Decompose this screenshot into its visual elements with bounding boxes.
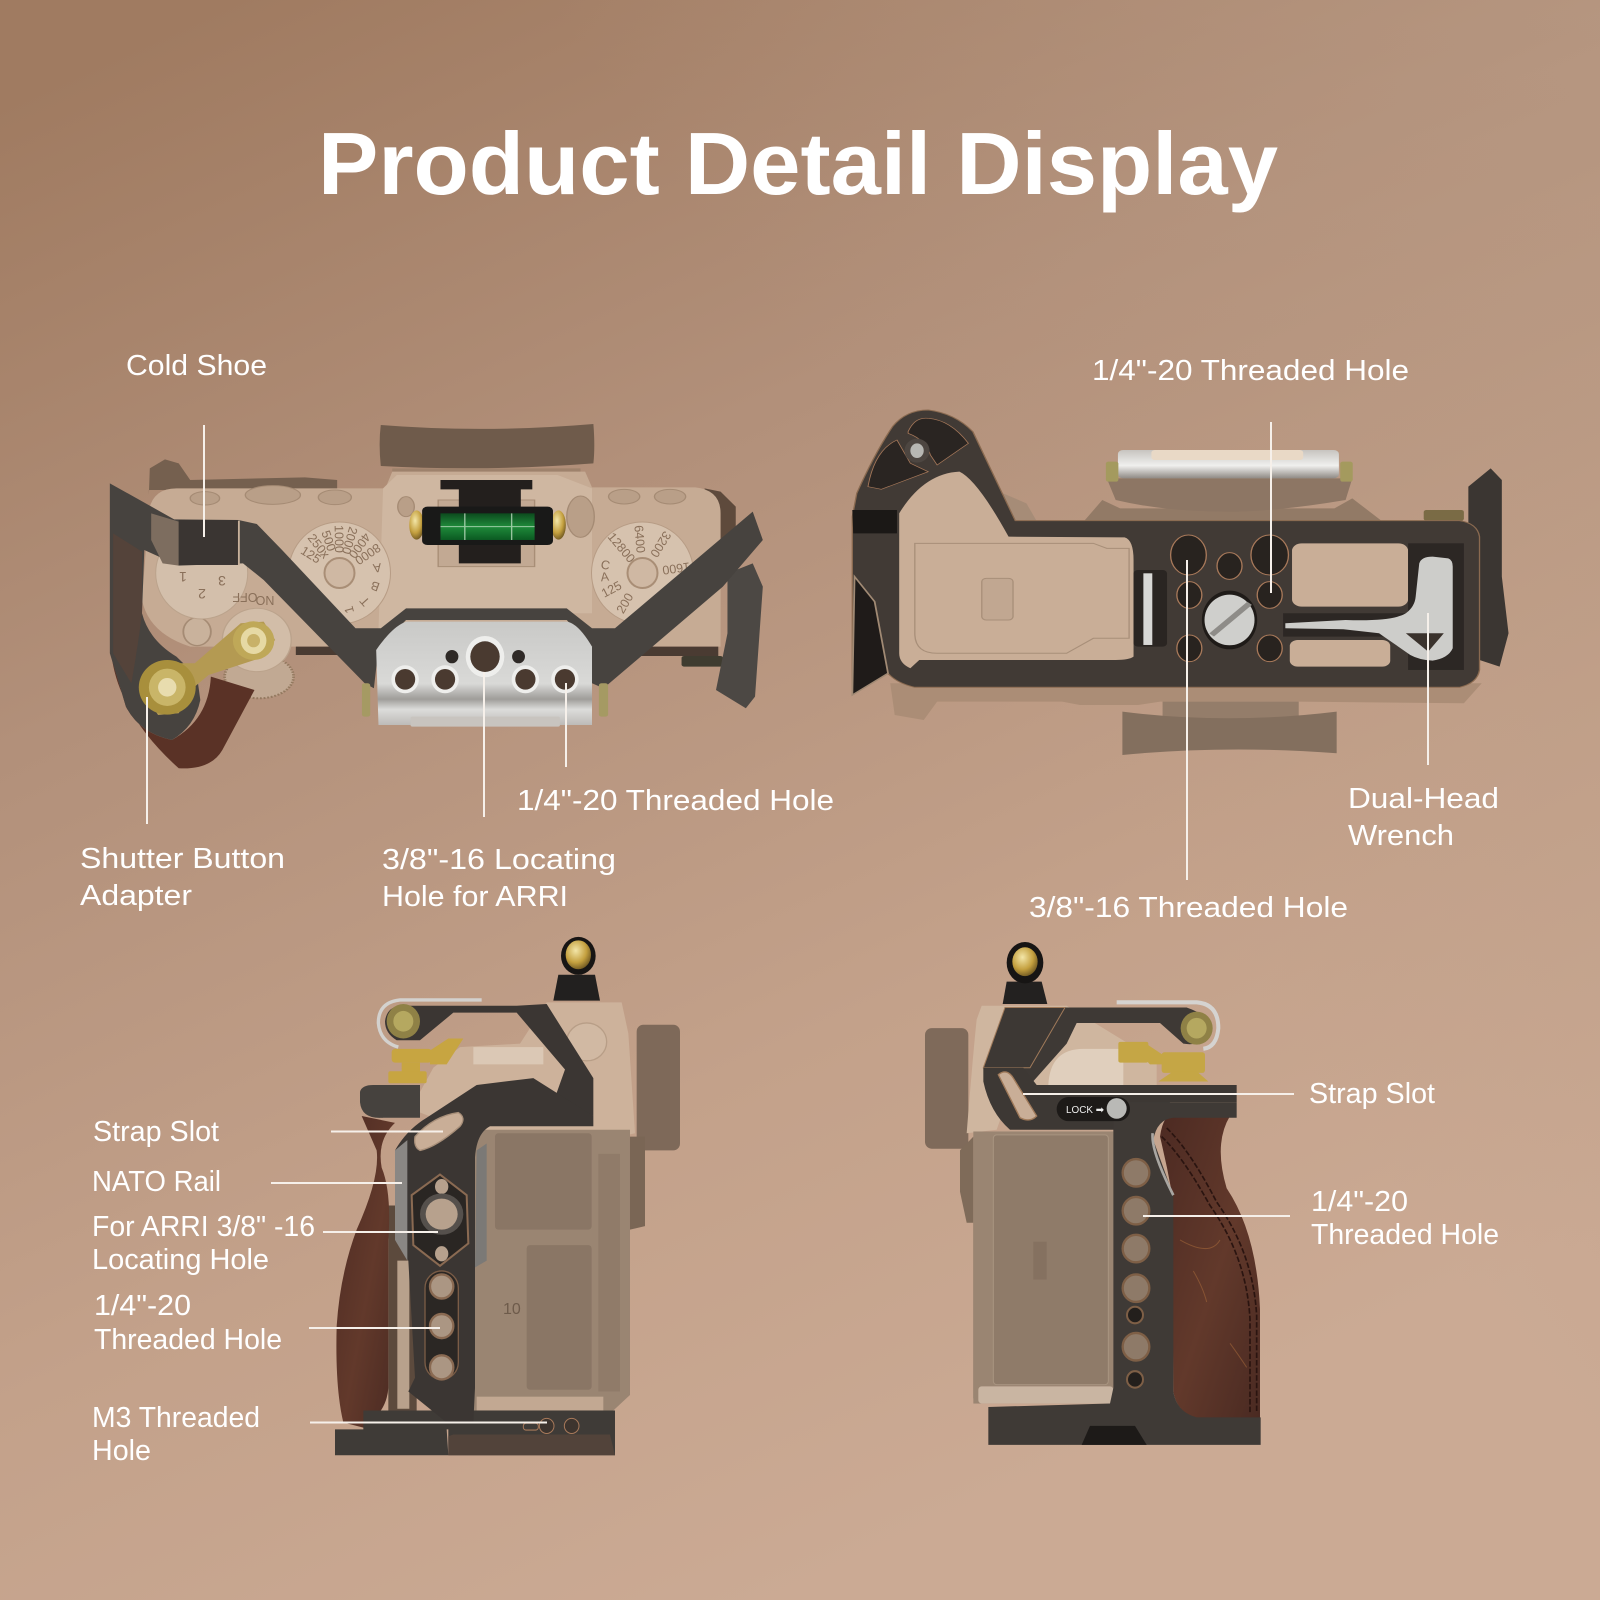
threaded holes — [1123, 1159, 1149, 1388]
panel: left side view of cage — [335, 937, 680, 1455]
dials: 12800 — [605, 530, 638, 566]
grip leather — [1160, 1113, 1260, 1419]
dials: 200 — [614, 591, 636, 616]
dials: 125 — [599, 578, 624, 601]
grip stitching — [1162, 1128, 1257, 1412]
top arm — [385, 1004, 593, 1116]
label: shutter button adapter: Adapter — [80, 880, 192, 912]
cage column and base — [988, 1102, 1261, 1445]
label: strap slot left: Strap Slot — [93, 1116, 219, 1148]
dials: 1600 — [661, 559, 691, 577]
label: dual-head wrench: Dual-Head — [1348, 783, 1499, 815]
label: dual-head wrench: Wrench — [1348, 820, 1454, 852]
dials: 125 — [298, 544, 323, 566]
faded eyecup — [380, 424, 594, 468]
cage band and column — [395, 1078, 593, 1422]
camera upper — [967, 1006, 1157, 1133]
dials: 3200 — [647, 529, 674, 560]
dials: OFF — [232, 590, 258, 604]
engraved model number: 10 — [503, 1301, 521, 1318]
dials: 6400 — [631, 525, 648, 554]
top plate — [360, 1085, 420, 1118]
strap ball — [553, 937, 600, 1001]
faded eyecup — [637, 1025, 680, 1150]
dials: 2000 — [339, 525, 360, 556]
dials: 8000 — [352, 540, 383, 568]
label: M3 threaded hole: Hole — [92, 1435, 151, 1467]
hex screw — [1181, 1012, 1213, 1045]
label: ARRI locating hole side: For ARRI 3/8" -16 — [92, 1211, 315, 1243]
power wheel — [225, 655, 294, 698]
label: threaded hole side left: Threaded Hole — [94, 1324, 282, 1356]
hot shoe — [438, 500, 535, 567]
dials: 500 — [318, 529, 338, 553]
dials: T — [357, 593, 373, 609]
plate holes — [391, 636, 579, 693]
dials: ON — [256, 594, 274, 608]
shutter button adapter — [139, 621, 275, 715]
dials: 4000 — [346, 530, 373, 561]
lock pill — [1057, 1097, 1130, 1121]
dials: 1000 — [332, 525, 346, 553]
strap slot — [415, 1113, 463, 1150]
dials: 1 — [179, 569, 187, 585]
inner frame strip — [388, 1206, 417, 1412]
brass coil — [388, 1038, 463, 1083]
camera body top — [142, 472, 721, 647]
label: threaded hole side left: 1/4"-20 — [94, 1290, 191, 1322]
corner block — [983, 1007, 1065, 1068]
strap ball — [1003, 942, 1047, 1004]
top insert and screw — [868, 440, 928, 489]
label: top right threaded hole: 1/4"-20 Threaded Hole — [1092, 355, 1409, 387]
threaded holes — [425, 1271, 458, 1379]
label: strap slot right: Strap Slot — [1309, 1078, 1435, 1110]
dials: 2 — [198, 586, 206, 602]
silver arc — [378, 1000, 482, 1047]
dials — [156, 522, 693, 624]
top arm — [1023, 1007, 1210, 1085]
grip leather — [336, 1116, 395, 1428]
label: threaded hole side right: 1/4"-20 — [1311, 1186, 1408, 1218]
hinge pin — [1134, 570, 1167, 647]
silver arc — [1117, 1002, 1218, 1049]
cage frame — [852, 410, 1480, 695]
label: 3/8 threaded hole: 3/8"-16 Threaded Hole — [1029, 892, 1348, 924]
cold shoe — [151, 513, 179, 566]
leather grip — [112, 660, 254, 768]
title: Product Detail Display — [318, 114, 1278, 213]
rear lever — [716, 563, 763, 708]
battery door window — [899, 472, 1134, 668]
brass hardware — [1118, 1042, 1208, 1082]
label: threaded hole side right: Threaded Hole — [1311, 1219, 1499, 1251]
label: ARRI locating hole: Hole for ARRI — [382, 881, 568, 913]
hex screw — [387, 1004, 420, 1038]
lock label: LOCK ➡ — [1066, 1105, 1105, 1116]
faded camera body — [473, 1130, 630, 1410]
faded eyecup — [925, 1028, 968, 1149]
dials: B — [369, 578, 382, 594]
panel: top view of cage — [110, 424, 763, 768]
captive screw — [1202, 591, 1257, 649]
dials: A — [600, 570, 610, 584]
dials: C — [599, 557, 611, 573]
ARRI locating plate — [412, 1175, 468, 1266]
panel: right side view of cage — [925, 942, 1261, 1445]
label: M3 threaded hole: M3 Threaded — [92, 1402, 260, 1434]
panel: bottom view of cage — [852, 410, 1509, 755]
label: ARRI locating hole: 3/8"-16 Locating — [382, 844, 616, 876]
label: NATO rail: NATO Rail — [92, 1166, 221, 1198]
leader lines — [147, 422, 1428, 1422]
foot plate — [335, 1410, 615, 1455]
label: shutter button adapter: Shutter Button — [80, 843, 285, 875]
label: plate threaded hole: 1/4"-20 Threaded Hole — [517, 785, 834, 817]
dials: 250x — [305, 531, 333, 562]
lens and silver bar behind — [1084, 498, 1381, 521]
mounting holes — [1171, 535, 1288, 662]
dials: A — [371, 560, 382, 575]
right lever — [1468, 468, 1509, 667]
cage band — [983, 1068, 1237, 1130]
label: ARRI locating hole side: Locating Hole — [92, 1244, 269, 1276]
cage frame — [110, 483, 763, 740]
dual-head wrench — [1285, 557, 1453, 661]
label: cold shoe: Cold Shoe — [126, 350, 267, 382]
strap slot — [998, 1072, 1037, 1120]
dials: 1 — [342, 604, 357, 615]
faded camera body — [960, 1137, 977, 1398]
right windows — [1292, 543, 1408, 607]
silver mounting plate — [376, 622, 592, 725]
dials: 3 — [218, 573, 226, 589]
faded camera underside — [890, 683, 1482, 720]
spirit level — [409, 507, 566, 545]
camera tan top — [420, 1002, 635, 1137]
